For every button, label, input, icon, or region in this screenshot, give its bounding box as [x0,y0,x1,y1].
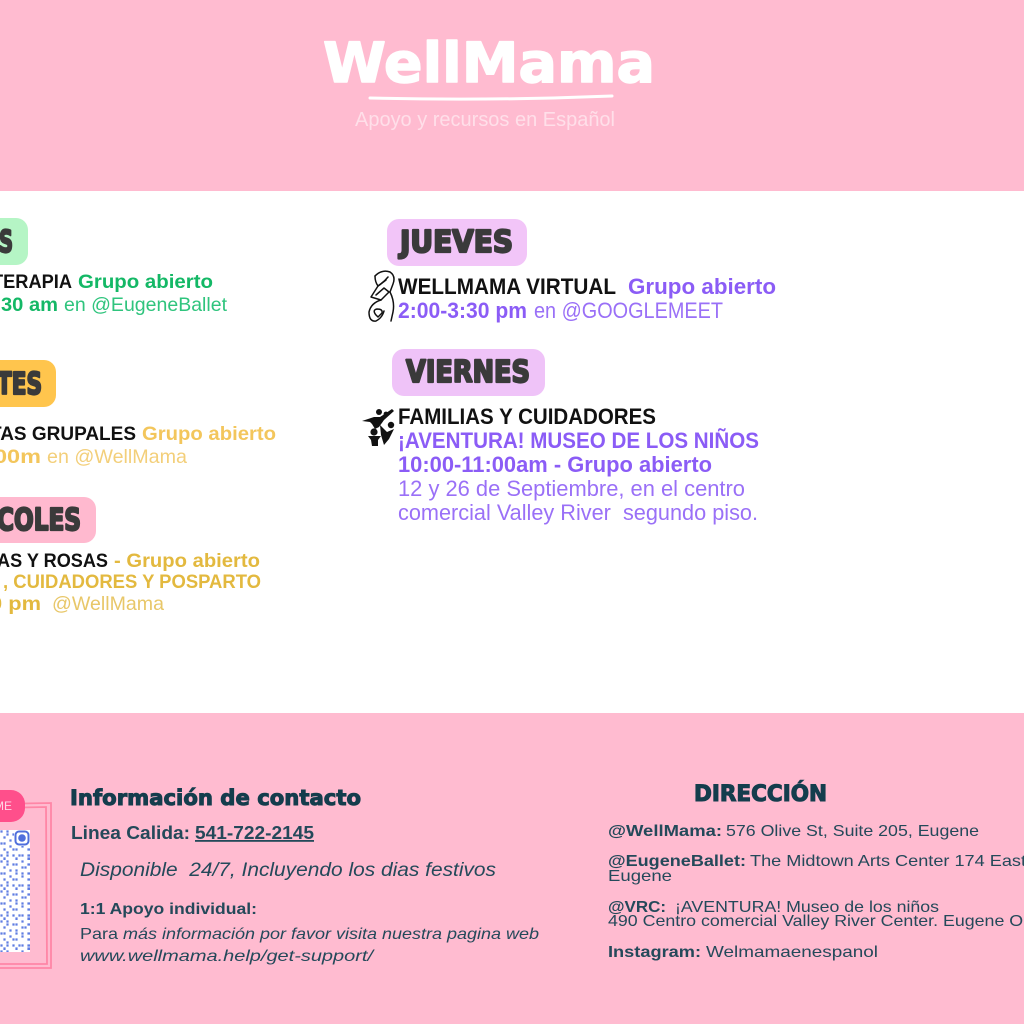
subtitle: Apoyo y recursos en Español [355,109,615,131]
panel: jueves [369,219,776,323]
availability: Disponible 24/7, Incluyendo los dias festivos [80,860,497,881]
panel: address: @VRC: [608,899,666,916]
hotline: Linea Calida: [71,823,190,843]
title: WellMama logo: WellMama [323,31,655,95]
panel: address: Welmamaenespanol [706,944,878,961]
panel: address: ¡AVENTURA! Museo de los niños [675,899,939,916]
panel: address: 490 Centro comercial Valley River Center. Eugene OR [608,913,1024,930]
panel: martes [0,360,276,468]
icon: family [362,409,394,446]
panel: contact information [70,786,539,965]
panel: lunes: 30 am [1,294,58,316]
panel: martes: en @WellMama [47,446,187,468]
panel: lunes: Grupo abierto [78,271,213,293]
panel: miercoles: - Grupo abierto [114,550,260,572]
panel: contact information: www.wellmama.help/get-support/ [80,948,375,965]
panel: address: @WellMama: [608,823,722,840]
address heading: DIRECCIÓN [694,781,827,807]
panel: jueves: 2:00-3:30 pm [398,298,527,323]
panel: address: 576 Olive St, Suite 205, Eugene [726,823,979,840]
panel: viernes: comercial Valley River segundo piso. [398,500,758,525]
panel: viernes: 10:00-11:00am - Grupo abierto [398,452,712,477]
panel: miercoles: COLES [0,503,81,538]
badge: viernes [392,349,545,396]
qr code with frame [0,790,51,968]
panel: address: Instagram: [608,944,701,961]
badge: jueves: JUEVES [398,225,513,260]
panel: jueves: Grupo abierto [628,274,776,299]
footer band [0,713,1024,1024]
panel: contact information: 541-722-2145 [195,823,314,843]
panel: contact information: Para más información por favor visita nuestra pagina web [80,926,539,943]
icon: pregnant mother [369,271,394,321]
panel: jueves: en @GOOGLEMEET [534,298,723,323]
badge: jueves [387,219,527,266]
panel: miercoles: , CUIDADORES Y POSPARTO [3,571,261,593]
panel: viernes: FAMILIAS Y CUIDADORES [398,404,656,429]
badge: viernes: VIERNES [406,355,530,390]
panel: lunes: en @EugeneBallet [64,294,228,316]
panel: viernes: 12 y 26 de Septiembre, en el centro [398,476,745,501]
panel: address: The Midtown Arts Center 174 East [750,853,1024,870]
panel: miercoles: AS Y ROSAS [0,550,108,572]
panel: lunes [0,218,228,316]
panel: address [608,781,1024,961]
panel: miercoles: @WellMama [52,593,164,615]
panel: martes: Grupo abierto [142,423,276,445]
individual support: 1:1 Apoyo individual: [80,901,257,918]
panel: miercoles [0,497,261,615]
panel: viernes [362,349,759,525]
panel: viernes: ¡AVENTURA! MUSEO DE LOS NIÑOS [398,428,759,453]
panel: jueves: WELLMAMA VIRTUAL [398,274,616,299]
panel: address: Eugene [608,868,672,885]
contact heading: Información de contacto [70,786,361,810]
header band [0,0,1024,191]
panel: address: @EugeneBallet: [608,853,746,870]
